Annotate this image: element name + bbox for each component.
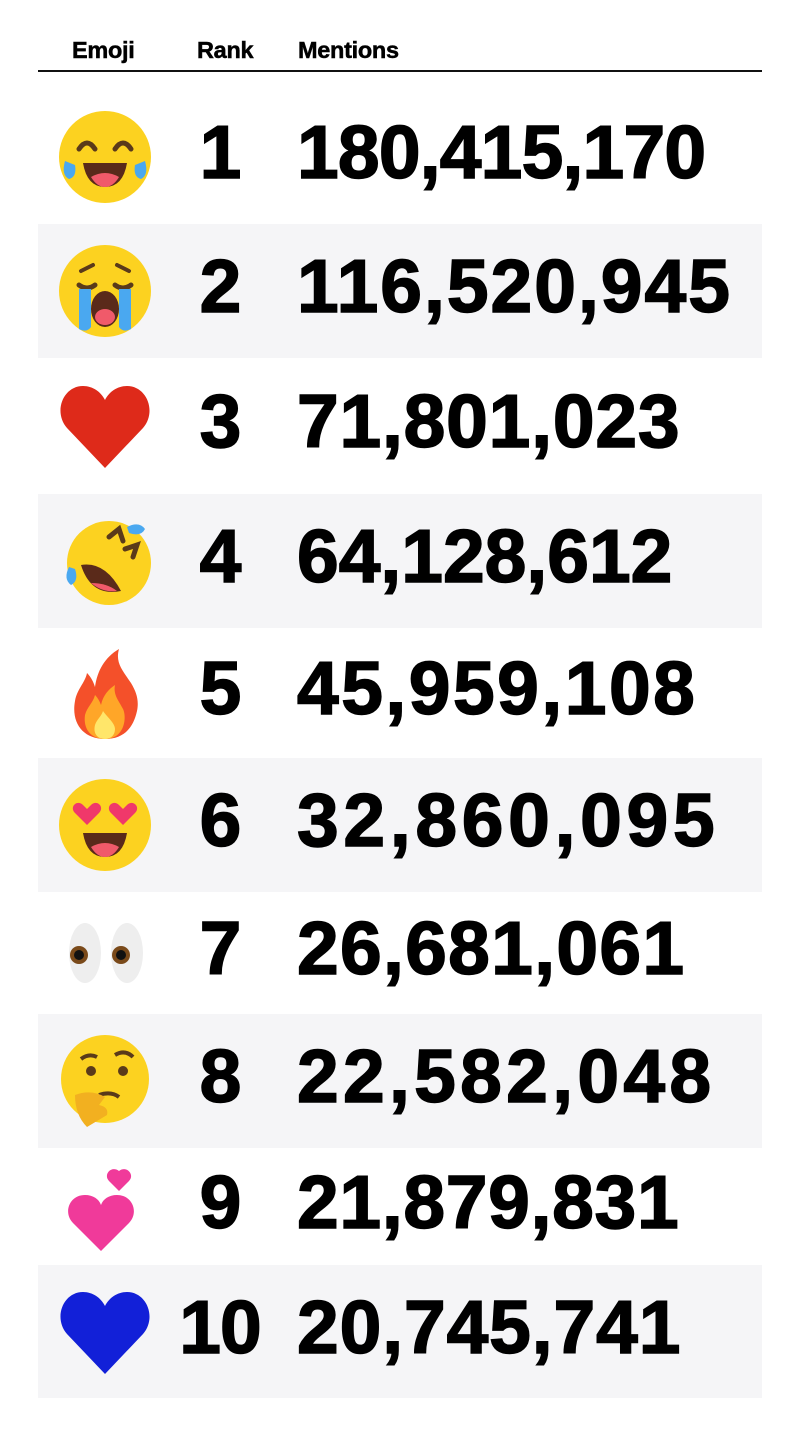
rank: 8 (200, 1034, 240, 1118)
row 4 (38, 494, 762, 628)
mentions: 71,801,023 (297, 379, 680, 463)
rank: 9 (200, 1160, 240, 1244)
icon: loudly crying face (59, 245, 151, 337)
row 3 (60, 379, 680, 468)
rank: 1 (200, 110, 240, 194)
mentions: 45,959,108 (297, 646, 697, 730)
rank: 7 (200, 906, 240, 990)
row 2 (38, 224, 762, 358)
row 7 (69, 906, 685, 990)
header: Emoji: Emoji (72, 37, 134, 63)
mentions: 26,681,061 (297, 906, 685, 990)
row 9 (68, 1160, 679, 1251)
rank: 4 (200, 514, 240, 598)
row 8 (38, 1014, 762, 1148)
mentions: 116,520,945 (297, 244, 732, 328)
rank: 6 (200, 778, 240, 862)
row 6 (38, 758, 762, 892)
icon: face with tears of joy (59, 111, 151, 203)
icon: heart eyes (59, 779, 151, 871)
rank: 10 (179, 1284, 261, 1368)
rank: 3 (200, 379, 240, 463)
icon: rolling on the floor laughing (66, 521, 151, 605)
rank: 2 (200, 244, 240, 328)
mentions: 180,415,170 (297, 110, 705, 194)
header: Mentions: Mentions (298, 37, 399, 63)
icon: blue heart (60, 1292, 150, 1374)
row 10 (38, 1265, 762, 1398)
icon: fire (74, 649, 138, 739)
header: Rank: Rank (197, 37, 253, 63)
mentions: 21,879,831 (297, 1160, 679, 1244)
row 5 (74, 646, 697, 739)
icon: heart exclamation (68, 1169, 134, 1251)
mentions: 20,745,741 (297, 1284, 681, 1368)
mentions: 32,860,095 (297, 778, 719, 862)
mentions: 22,582,048 (297, 1034, 715, 1118)
row 1 (59, 110, 705, 203)
icon: eyes (69, 923, 143, 983)
mentions: 64,128,612 (297, 514, 672, 598)
icon: thinking face (61, 1035, 149, 1127)
icon: red heart (60, 386, 150, 468)
rank: 5 (200, 646, 240, 730)
